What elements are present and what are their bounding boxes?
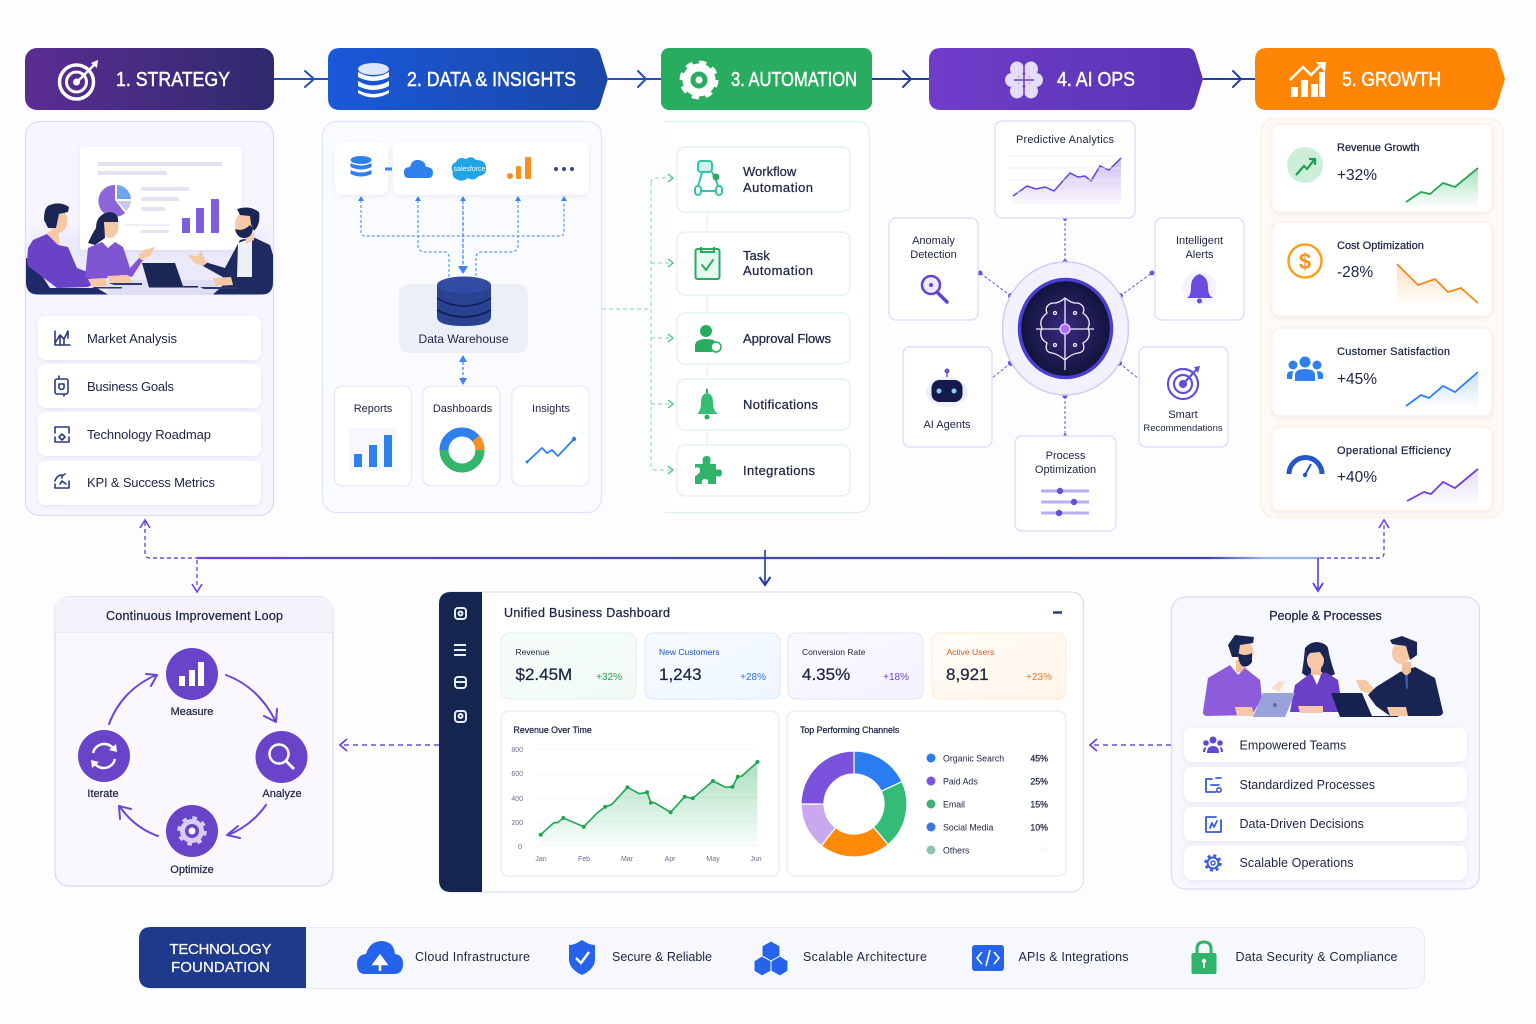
card: operational efficiency: +40%	[1337, 469, 1377, 486]
row: KPI and success metrics: KPI & Success Metrics	[87, 475, 216, 490]
item: scalable architecture: Scalable Architecture	[803, 950, 927, 964]
arrow: data to automation	[608, 71, 661, 87]
card: notifications	[677, 379, 850, 430]
row: scalable operations: Scalable Operations	[1240, 856, 1354, 870]
icon: robot	[926, 368, 968, 407]
AI core	[1002, 262, 1128, 395]
icon: purple target	[1168, 366, 1200, 399]
icon: salesforce cloud	[452, 157, 486, 181]
KPI: new customers: 1,243	[659, 665, 702, 684]
row: market analysis	[38, 316, 261, 360]
card: predictive analytics	[995, 121, 1135, 218]
icon: analytics bars	[507, 157, 531, 179]
icon: warehouse cylinder	[437, 276, 491, 326]
KPI: revenue	[501, 633, 636, 699]
chart: revenue over time: Jan	[535, 856, 547, 863]
KPI: revenue: Revenue	[516, 647, 550, 657]
item: cloud infrastructure: Cloud Infrastructure	[415, 950, 530, 964]
card: smart recommendations	[1139, 347, 1228, 447]
step: optimize: Optimize	[170, 864, 214, 876]
card: approval flows: Approval Flows	[743, 331, 832, 346]
card: reports	[334, 386, 412, 486]
header: 1. Strategy	[25, 48, 274, 110]
connectors: hub spokes	[978, 217, 1154, 436]
KPI: revenue: +32%	[596, 672, 622, 683]
legend	[926, 754, 1048, 856]
KPI: revenue: $2.45M	[516, 665, 572, 684]
card: AI agents	[903, 347, 992, 447]
donut chart	[801, 751, 907, 857]
legend: 10%	[1030, 822, 1048, 832]
band: technology foundation	[139, 927, 1424, 988]
panel: people and processes: People & Processes	[1269, 609, 1382, 623]
diagram: AI ops hub	[889, 121, 1244, 531]
chart: revenue over time: Mar	[621, 856, 634, 863]
item: secure and reliable	[569, 940, 712, 975]
loop arrows	[109, 674, 277, 838]
icon: magnifier	[922, 276, 947, 302]
chart: top performing channels	[787, 711, 1066, 876]
card: smart recommendations: Recommendations	[1143, 423, 1223, 434]
connectors: sources to warehouse	[358, 196, 567, 280]
connectors: feedback bus	[140, 520, 1389, 592]
row: standardized processes	[1184, 767, 1467, 802]
KPI: active users	[932, 633, 1066, 699]
header: 4. AI Ops: 4. AI OPS	[1057, 69, 1135, 91]
icon: dollar	[1288, 244, 1322, 278]
item: APIs and integrations: APIs & Integrations	[1018, 950, 1128, 964]
card: revenue growth: Revenue Growth	[1337, 142, 1420, 154]
card: cost optimization	[1272, 222, 1492, 316]
panel: growth	[1261, 118, 1503, 518]
header: 1. Strategy: 1. STRATEGY	[116, 69, 230, 91]
legend: Email	[943, 800, 965, 810]
card: insights	[512, 386, 589, 486]
row: KPI and success metrics	[38, 461, 261, 505]
card: customer satisfaction: +45%	[1337, 371, 1377, 388]
connectors: automation branches	[602, 174, 707, 474]
KPI: conversion rate: 4.35%	[802, 665, 850, 684]
icon: workflow	[695, 161, 722, 195]
arrow: dashboard to people	[1090, 739, 1171, 751]
icon: clipboard	[696, 247, 720, 279]
KPI: conversion rate	[788, 633, 923, 699]
KPI: conversion rate: Conversion Rate	[802, 647, 866, 657]
icon: salesforce cloud: salesforce	[454, 166, 486, 173]
panel: people and processes	[1172, 597, 1480, 889]
row: technology roadmap: Technology Roadmap	[87, 427, 211, 442]
step: iterate: Iterate	[87, 788, 119, 800]
card: predictive analytics: Predictive Analytics	[1016, 134, 1114, 146]
card: intelligent alerts: Intelligent	[1176, 235, 1223, 247]
card: insights: Insights	[532, 403, 570, 415]
step: analyze: Analyze	[262, 788, 302, 800]
icon: database	[358, 63, 389, 98]
header: 4. AI Ops	[929, 48, 1203, 110]
chart: revenue over time: 400	[511, 796, 523, 803]
legend: 45%	[1030, 754, 1048, 764]
arrow: dashboard to loop	[340, 739, 439, 751]
item: APIs and integrations	[972, 945, 1128, 971]
card: task automation: Automation	[743, 263, 813, 278]
icon: alert bell	[1182, 271, 1216, 305]
chart: revenue over time	[501, 711, 779, 876]
arrow: warehouse to outputs	[459, 355, 467, 385]
header: 5. Growth: 5. GROWTH	[1342, 69, 1441, 91]
icon: growth circle	[1287, 147, 1323, 183]
panel: automation	[602, 122, 870, 512]
icon: gauge	[1289, 458, 1322, 477]
step: measure: Measure	[171, 706, 213, 718]
KPI: new customers	[645, 633, 780, 699]
KPI: active users: 8,921	[946, 665, 989, 684]
panel: unified business dashboard	[439, 592, 1084, 892]
card: revenue growth: +32%	[1337, 167, 1377, 184]
band: technology foundation: TECHNOLOGY	[170, 941, 272, 958]
card: customer satisfaction: Customer Satisfaction	[1337, 346, 1450, 358]
arrow: AI ops to growth	[1203, 71, 1255, 87]
card: task automation	[677, 232, 850, 295]
step: measure	[166, 648, 218, 718]
card: process optimization	[1015, 436, 1116, 531]
icon: cloud	[404, 160, 433, 178]
row: standardized processes: Standardized Processes	[1240, 778, 1375, 792]
chart: revenue over time: 600	[511, 771, 523, 778]
step: optimize	[166, 805, 218, 876]
panel: strategy	[26, 122, 274, 516]
arrow: automation to AI ops	[872, 71, 929, 87]
band: technology foundation: FOUNDATION	[171, 959, 270, 976]
legend: Social Media	[943, 822, 993, 832]
data warehouse	[399, 276, 528, 353]
step: iterate	[78, 730, 130, 800]
card: operational efficiency	[1272, 427, 1492, 511]
card: workflow automation: Automation	[743, 180, 813, 195]
row: data-driven decisions	[1184, 807, 1467, 841]
legend: %	[1040, 846, 1048, 856]
KPI: conversion rate: +18%	[883, 672, 909, 683]
illustration: team at table	[1203, 635, 1443, 717]
row: scalable operations	[1184, 846, 1467, 880]
item: scalable architecture	[754, 941, 927, 976]
card: smart recommendations: Smart	[1168, 409, 1198, 421]
icon: people	[1287, 356, 1323, 381]
chart: revenue over time: Apr	[665, 856, 676, 863]
card: AI agents: AI Agents	[923, 419, 971, 431]
card: customer satisfaction	[1272, 328, 1492, 416]
card: dashboards: Dashboards	[433, 403, 493, 415]
item: data security and compliance	[1192, 942, 1398, 974]
card: integrations: Integrations	[743, 463, 816, 478]
KPI: new customers: +28%	[740, 672, 766, 683]
icon: brain	[1005, 62, 1043, 98]
icon: target	[60, 60, 98, 99]
arrow: strategy to data	[274, 71, 328, 87]
row: empowered teams: Empowered Teams	[1240, 738, 1346, 752]
header: 2. Data & Insights: 2. DATA & INSIGHTS	[407, 69, 576, 91]
card: process optimization: Process	[1046, 450, 1086, 462]
card: approval flows	[677, 313, 850, 364]
illustration: strategy meeting	[26, 147, 273, 295]
row: market analysis: Market Analysis	[87, 331, 178, 346]
data warehouse: Data Warehouse	[418, 332, 509, 346]
card: cost optimization: -28%	[1337, 264, 1373, 281]
sidebar	[439, 592, 482, 892]
card: intelligent alerts: Alerts	[1185, 249, 1214, 261]
card: process optimization: Optimization	[1035, 464, 1096, 476]
card: intelligent alerts	[1155, 218, 1244, 320]
header: 2. Data & Insights	[328, 48, 608, 110]
icon: bell	[697, 389, 718, 420]
legend: 15%	[1030, 800, 1048, 810]
card: anomaly detection: Detection	[910, 249, 957, 261]
panel: continuous improvement loop: Continuous Improvement Loop	[106, 609, 283, 623]
icon: dollar: $	[1299, 249, 1311, 274]
icon: puzzle	[695, 456, 722, 484]
chart: revenue over time: 0	[518, 844, 522, 851]
header: 3. Automation: 3. AUTOMATION	[731, 69, 857, 91]
icon: neural brain	[1036, 298, 1094, 370]
header: 3. Automation	[661, 48, 872, 110]
KPI: active users: +23%	[1026, 672, 1052, 683]
card: anomaly detection: Anomaly	[912, 235, 955, 247]
item: secure and reliable: Secure & Reliable	[612, 950, 712, 964]
arrow: source link	[385, 168, 392, 170]
chart: revenue over time: 800	[511, 747, 523, 754]
row: data-driven decisions: Data-Driven Decisions	[1240, 817, 1364, 831]
chart: revenue over time: May	[706, 856, 720, 863]
item: cloud infrastructure	[357, 941, 530, 974]
legend: Others	[943, 846, 970, 856]
icon: gear	[682, 63, 716, 97]
legend: Organic Search	[943, 754, 1004, 764]
card: workflow automation: Workflow	[743, 164, 797, 179]
card: operational efficiency: Operational Efficiency	[1337, 445, 1452, 457]
icon: more dots	[554, 167, 574, 171]
row: empowered teams	[1184, 728, 1467, 762]
card: dashboards	[423, 386, 500, 486]
card: cost optimization: Cost Optimization	[1337, 240, 1424, 252]
KPI: active users: Active Users	[946, 647, 994, 657]
icon: menu dots	[1053, 611, 1062, 614]
row: technology roadmap	[38, 412, 261, 456]
icon: approval person	[695, 325, 721, 352]
card: workflow automation	[677, 147, 850, 212]
chart: revenue over time: 200	[511, 820, 523, 827]
card: source connectors	[393, 142, 589, 195]
step: analyze	[256, 731, 308, 800]
chart: revenue over time: Revenue Over Time	[514, 725, 592, 735]
card: integrations	[677, 445, 850, 496]
card: reports: Reports	[354, 403, 393, 415]
header: 5. Growth	[1255, 48, 1505, 110]
panel: continuous improvement loop	[55, 597, 333, 886]
card: notifications: Notifications	[743, 397, 818, 412]
card: anomaly detection	[889, 218, 978, 320]
legend: 25%	[1030, 776, 1048, 786]
KPI: new customers: New Customers	[659, 647, 719, 657]
card: revenue growth	[1272, 124, 1492, 212]
chart: revenue over time: Feb	[578, 856, 590, 863]
card: source database	[335, 142, 388, 195]
icon: sliders	[1041, 488, 1089, 516]
panel: data and insights	[322, 122, 602, 512]
chart: revenue over time: Jun	[750, 856, 762, 863]
row: business goals	[38, 364, 261, 408]
icon: growth chart	[1290, 62, 1326, 97]
card: task automation: Task	[743, 248, 770, 263]
chart: top performing channels: Top Performing Channels	[800, 725, 900, 735]
panel: unified business dashboard: Unified Business Dashboard	[504, 606, 670, 620]
row: business goals: Business Goals	[87, 379, 174, 394]
item: data security and compliance: Data Security & Compliance	[1236, 950, 1398, 964]
legend: Paid Ads	[943, 776, 978, 786]
